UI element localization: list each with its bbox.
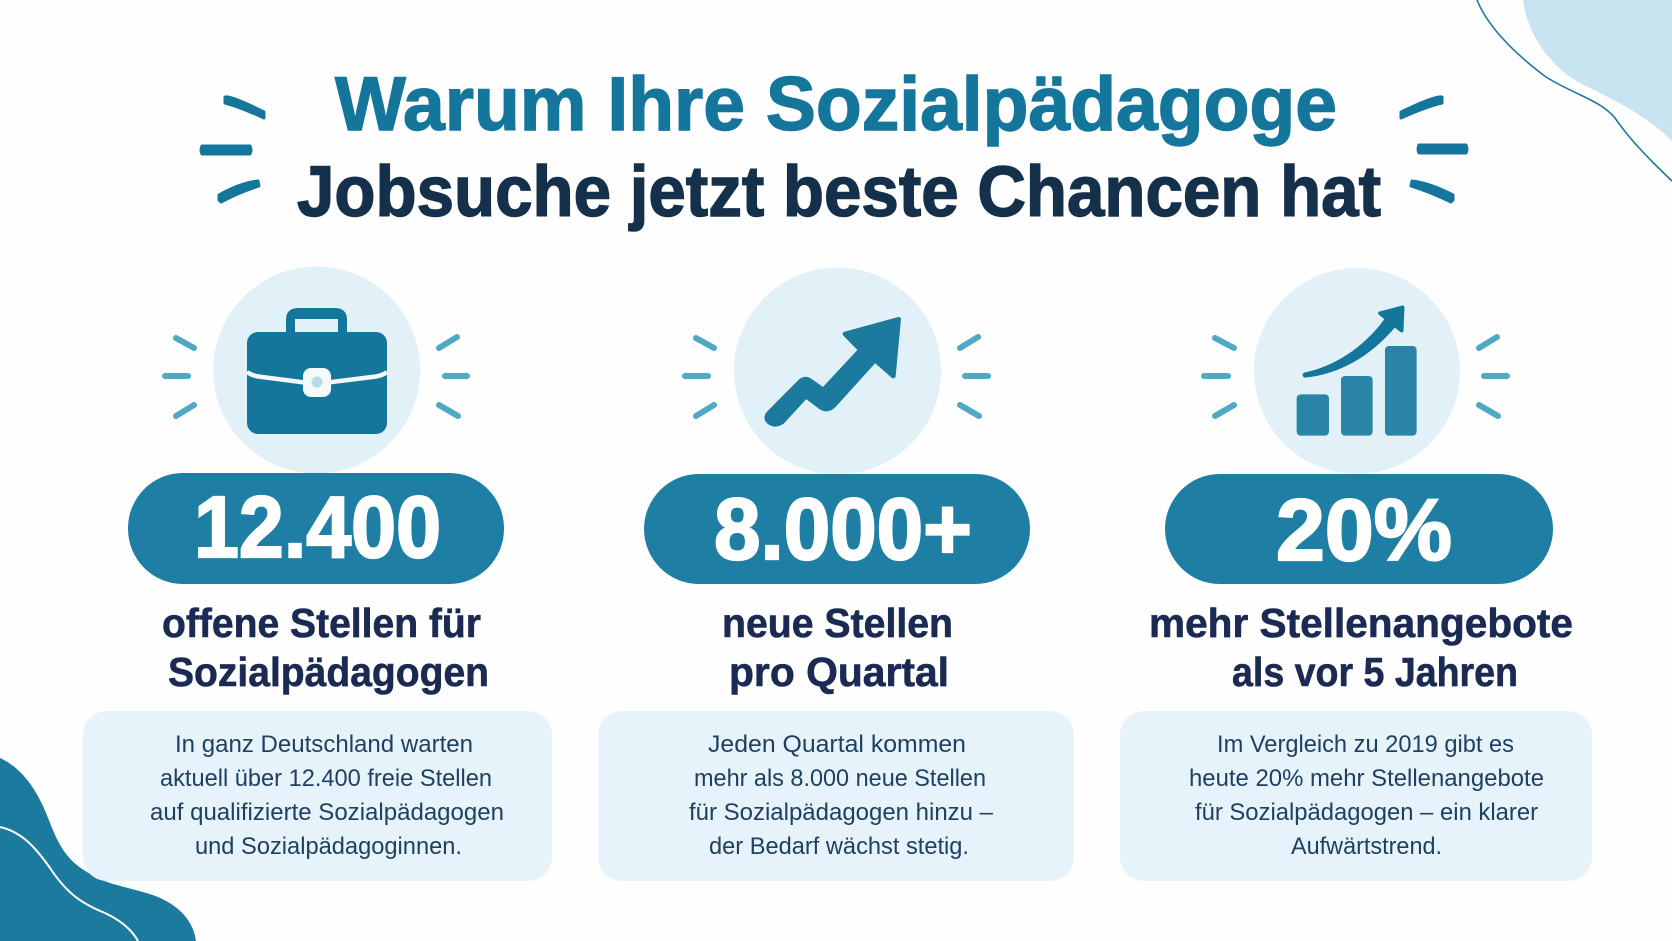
label: neue Stellen [722,600,953,646]
decoration: bottom-left blob [0,758,196,941]
icon: bar chart with arrow [1297,307,1417,436]
icon: briefcase [247,308,387,434]
rays [165,337,467,416]
label [722,600,953,695]
stat pill [1165,474,1553,584]
description text [1189,731,1544,860]
title rays left [201,97,264,202]
description text [689,731,994,860]
icon circle [213,266,420,474]
description text: aktuell über 12.400 freie Stellen [160,765,492,792]
description text: In ganz Deutschland warten [175,731,473,758]
label [1149,600,1573,695]
description text: für Sozialpädagogen – ein klarer [1195,799,1538,826]
icon circle [734,268,941,474]
title line 2: Jobsuche jetzt beste Chancen hat [297,153,1381,232]
description text: Jeden Quartal kommen [708,731,966,758]
description text: heute 20% mehr Stellenangebote [1189,765,1544,792]
label [162,600,489,695]
description box [598,711,1074,881]
stat number: 20% [1276,482,1452,579]
stat pill [644,474,1030,584]
panel: growth [1120,268,1592,881]
description text: Aufwärtstrend. [1291,833,1442,860]
label: pro Quartal [729,649,949,695]
label: mehr Stellenangebote [1149,600,1573,646]
description text: Im Vergleich zu 2019 gibt es [1217,731,1514,758]
label: als vor 5 Jahren [1232,649,1518,695]
description box [83,711,552,881]
description text: auf qualifizierte Sozialpädagogen [150,799,504,826]
stat number: 12.400 [194,479,441,576]
icon circle [1254,268,1460,474]
description text: und Sozialpädagoginnen. [195,833,462,860]
stat pill [128,473,504,584]
description text: der Bedarf wächst stetig. [709,833,969,860]
description box [1120,711,1592,881]
title line 1: Warum Ihre Sozialpädagoge [335,62,1337,147]
description text: mehr als 8.000 neue Stellen [694,765,986,792]
title rays right [1401,97,1467,202]
panel: new positions [598,268,1074,881]
stat number: 8.000+ [714,481,972,578]
rays [1204,337,1507,416]
description text [150,731,504,860]
label: Sozialpädagogen [168,649,489,695]
title [297,62,1381,232]
icon: rising arrow [767,319,899,424]
decoration: top-right blob [1477,0,1672,181]
label: offene Stellen für [162,600,481,646]
panel: open positions [83,266,552,881]
rays [685,337,988,416]
description text: für Sozialpädagogen hinzu – [689,799,994,826]
